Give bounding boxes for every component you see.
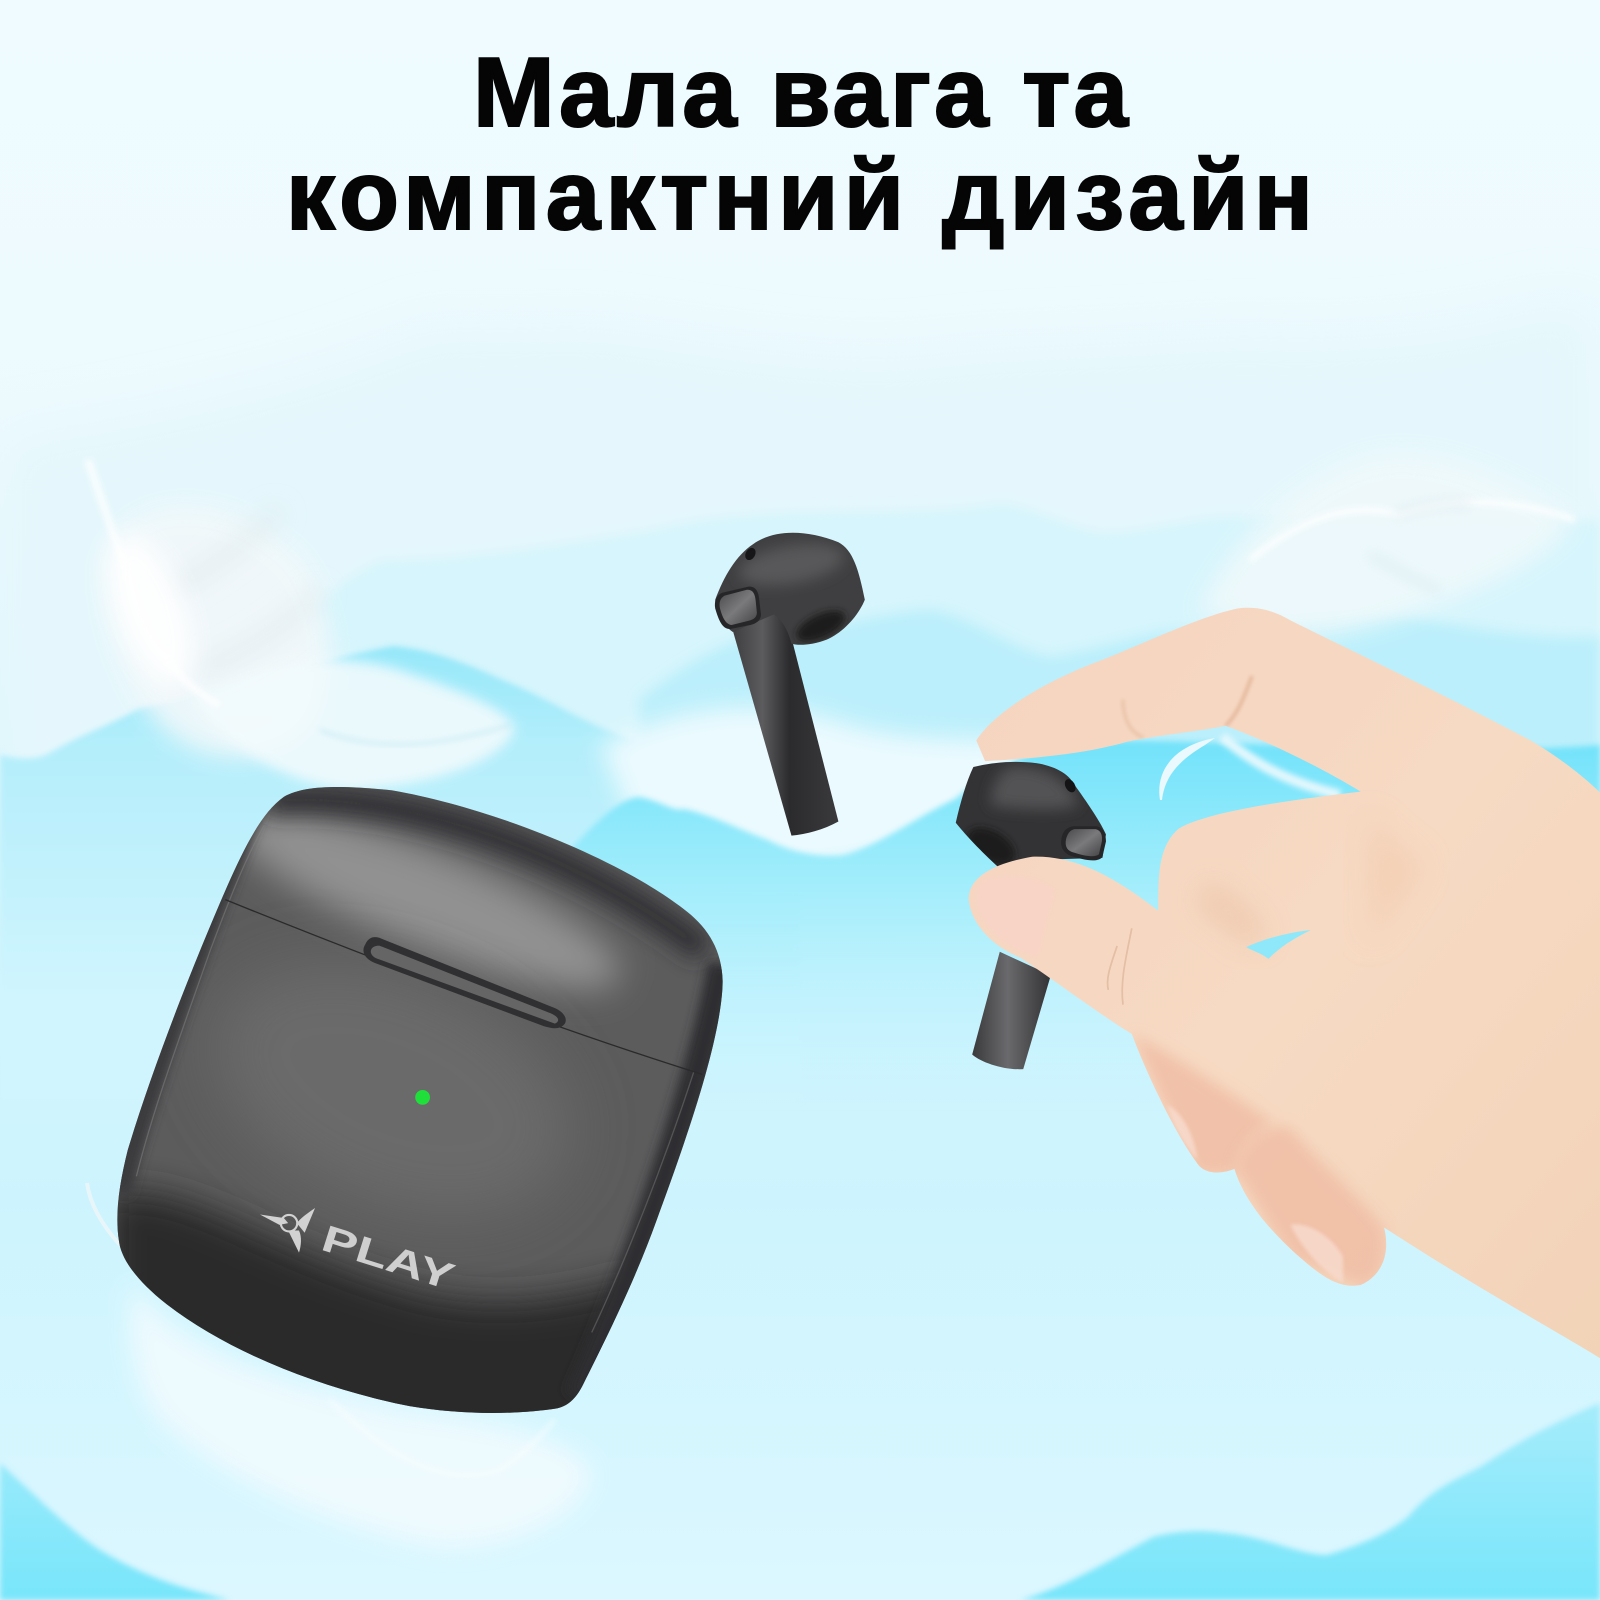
middle finger shadow — [1202, 888, 1258, 940]
head — [715, 533, 865, 645]
lower fingers shading — [1132, 1034, 1273, 1175]
finger notch — [363, 937, 566, 1028]
index finger crease — [1226, 676, 1252, 726]
feather: left — [88, 460, 515, 790]
title: Мала вага та — [473, 37, 1129, 147]
hole — [1063, 777, 1078, 794]
charging case — [106, 777, 723, 1454]
touch button — [715, 587, 761, 629]
thumb knuckle creases — [1108, 928, 1132, 1005]
hand — [969, 608, 1600, 1362]
stem — [972, 952, 1051, 1069]
logo: PLAY: PLAY — [317, 1217, 459, 1298]
touch button — [1061, 826, 1106, 860]
hole — [743, 546, 758, 562]
feather: under the case — [87, 1183, 592, 1547]
lid seam — [225, 900, 702, 1074]
thumb nail — [976, 876, 1056, 958]
title — [286, 37, 1313, 250]
earbud: floating — [715, 533, 865, 836]
head — [956, 762, 1106, 868]
stem — [730, 606, 838, 836]
title: компактний дизайн — [286, 140, 1313, 250]
gap between fingers — [1246, 930, 1311, 959]
logo: PLAY — [260, 1208, 459, 1298]
feather wisp behind fingers — [1159, 737, 1340, 800]
feather: right — [1198, 454, 1575, 637]
earbud: held — [956, 762, 1106, 1069]
status LED — [415, 1090, 430, 1105]
